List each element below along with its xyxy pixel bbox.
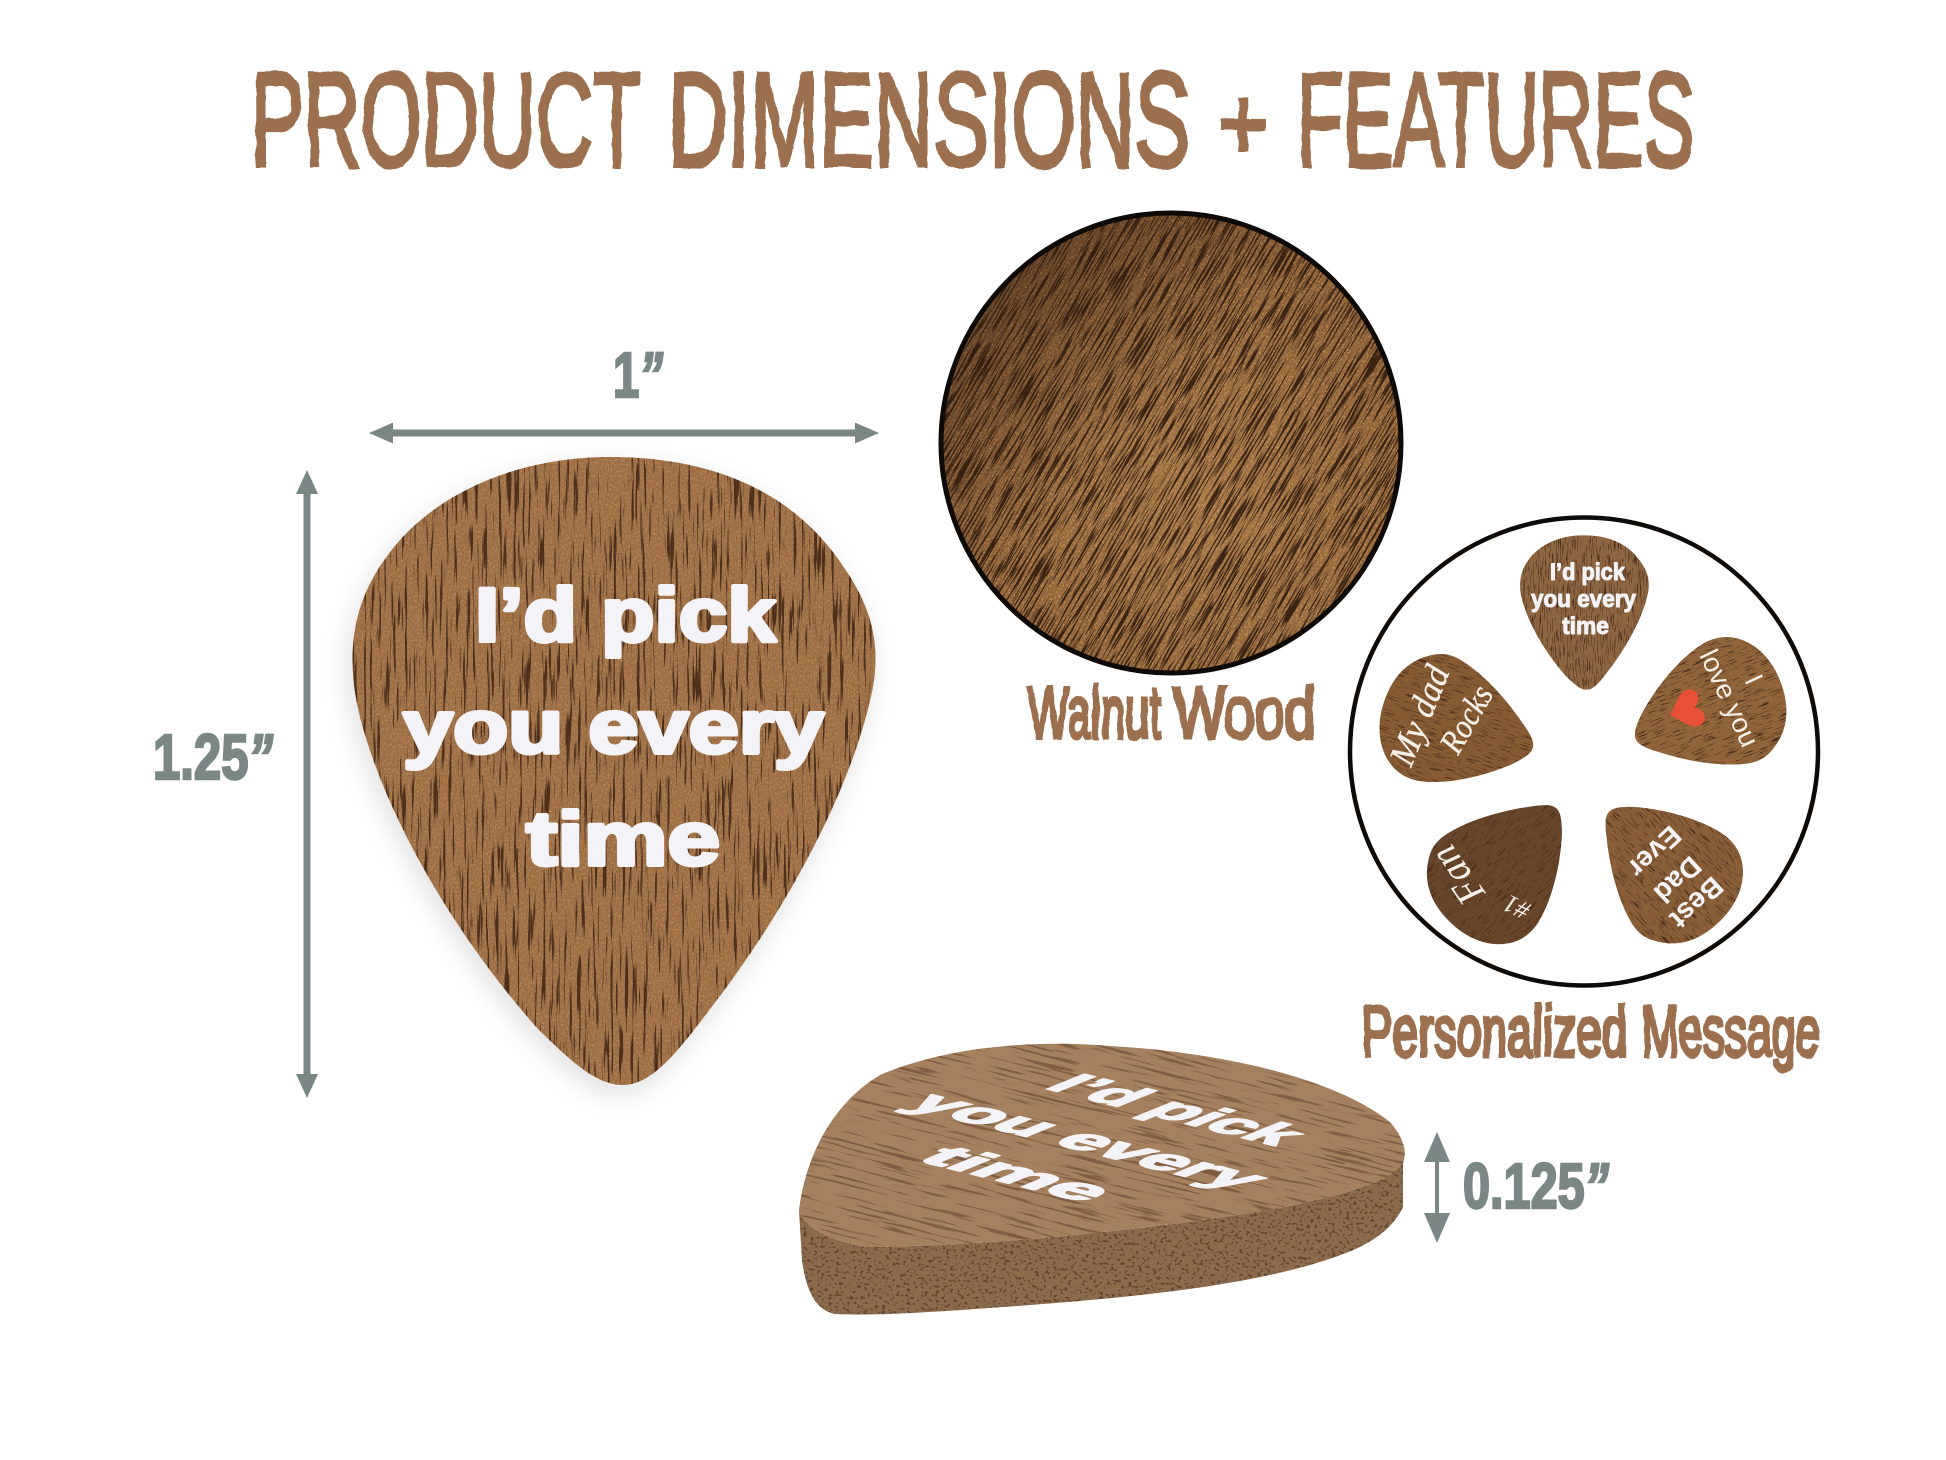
pick message: you every	[403, 685, 824, 770]
pick: #1 Fan: Fan	[1421, 837, 1494, 914]
height arrow	[296, 470, 318, 1098]
walnut wood label: Walnut	[1028, 673, 1161, 754]
circle outline	[941, 213, 1401, 673]
title: DIMENSIONS	[668, 46, 1190, 195]
pick message: time	[526, 797, 720, 882]
pick edge	[799, 1163, 1403, 1314]
pick: I'd pick you every time	[1516, 533, 1653, 692]
icon: red heart	[1664, 687, 1707, 733]
pick message in perspective: time	[903, 1141, 1133, 1207]
main guitar pick, front view	[334, 446, 894, 1096]
title	[251, 46, 1694, 195]
pick top surface	[799, 1044, 1405, 1247]
personalized message label: Message	[1642, 993, 1820, 1072]
pick: Best Dad Ever: Dad	[1648, 850, 1708, 909]
pick: #1 Fan	[1426, 805, 1562, 944]
title: +	[1218, 68, 1268, 180]
pick: I'd pick you every time: you every	[1531, 586, 1637, 613]
pick: My dad Rocks: Rocks	[1432, 679, 1501, 761]
pick wood body	[334, 446, 894, 1096]
height label: 1.25”	[153, 721, 273, 793]
pick: Best Dad Ever: Ever	[1622, 820, 1687, 884]
pick message	[403, 573, 824, 882]
pick: I love you: I	[1739, 670, 1769, 689]
pick: Best Dad Ever: Best	[1664, 871, 1729, 935]
thickness label: 0.125”	[1463, 1150, 1609, 1222]
pick shadow	[348, 466, 872, 1094]
pick message in perspective	[891, 1069, 1324, 1207]
pick: My dad Rocks	[1380, 654, 1534, 782]
width label: 1”	[613, 339, 663, 411]
pick: Best Dad Ever	[1606, 806, 1743, 944]
width dimension: 1 inch	[369, 339, 879, 444]
pick message in perspective: you every	[891, 1087, 1286, 1195]
pick: My dad Rocks: My dad	[1381, 659, 1458, 772]
circle outline	[1350, 518, 1818, 986]
title: PRODUCT	[251, 46, 641, 195]
pick message: I’d pick	[475, 573, 777, 658]
thickness arrow	[1424, 1132, 1450, 1243]
personalized message circle	[1350, 518, 1818, 986]
wood grain	[944, 216, 1398, 670]
walnut wood close-up circle	[938, 210, 1404, 676]
pick: I'd pick you every time: time	[1562, 613, 1609, 640]
width arrow	[369, 422, 879, 444]
side-view guitar pick	[799, 1044, 1405, 1314]
thickness dimension: 0.125 inch	[1424, 1132, 1609, 1243]
pick: I'd pick you every time: I’d pick	[1550, 559, 1626, 586]
walnut wood label: Wood	[1174, 673, 1315, 754]
pick message in perspective: I’d pick	[1031, 1069, 1324, 1151]
pick: #1 Fan: #1	[1499, 889, 1535, 926]
height dimension: 1.25 inch	[153, 470, 318, 1098]
pick: I love you: love you	[1694, 645, 1765, 752]
personalized message label: Personalized	[1362, 993, 1627, 1072]
pick: I love you	[1634, 637, 1786, 764]
